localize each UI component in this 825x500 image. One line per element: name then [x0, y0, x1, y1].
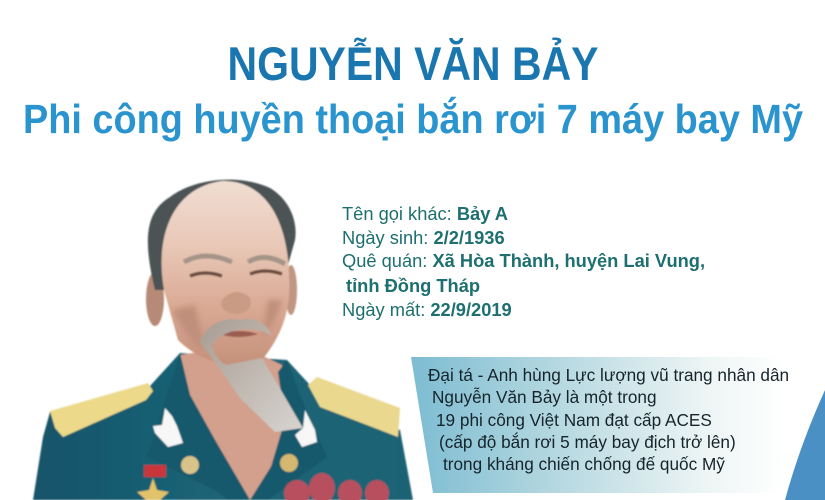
left collar pin — [181, 456, 199, 474]
right ear — [285, 265, 297, 315]
panel text: (cấp độ bắn rơi 5 máy bay địch trở lên) — [439, 432, 736, 452]
bio line: alias: Tên gọi khác: Bảy A — [342, 203, 508, 224]
panel text — [428, 365, 789, 474]
description panel — [411, 357, 825, 493]
mouth — [218, 331, 258, 337]
neck and open collar — [180, 345, 285, 500]
left collar lapel — [147, 353, 250, 500]
bio line: hometown: Quê quán: Xã Hòa Thành, huyện Lai Vung, — [342, 250, 705, 271]
moustache and goatee — [200, 319, 303, 432]
panel text: Đại tá - Anh hùng Lực lượng vũ trang nhân dân — [428, 365, 789, 385]
right collar pin — [280, 454, 298, 472]
hero medal — [137, 465, 169, 500]
portrait: veteran pilot in uniform — [33, 180, 413, 500]
right wing badge — [295, 410, 317, 447]
right collar lapel — [250, 360, 327, 500]
eyes — [190, 271, 282, 276]
nose — [221, 292, 251, 314]
panel text: 19 phi công Việt Nam đạt cấp ACES — [436, 410, 712, 430]
panel text: trong kháng chiến chống đế quốc Mỹ — [443, 454, 725, 474]
title: name: NGUYỄN VĂN BẢY — [228, 37, 598, 90]
bio line: birth date: Ngày sinh: 2/2/1936 — [342, 227, 505, 248]
corner arc — [785, 390, 825, 500]
bio line: province: tỉnh Đồng Tháp — [346, 275, 480, 296]
eyebrows — [184, 256, 285, 264]
cheek shade — [172, 300, 282, 350]
uniform jacket — [33, 353, 413, 500]
left wing badge — [153, 408, 183, 447]
left epaulet — [50, 383, 153, 437]
medal row — [284, 473, 389, 500]
panel background — [411, 357, 825, 493]
panel text: Nguyễn Văn Bảy là một trong — [432, 387, 657, 407]
bio details — [342, 203, 705, 320]
right epaulet — [308, 377, 400, 437]
left ear — [146, 272, 164, 326]
hair — [148, 180, 296, 290]
bio line: death date: Ngày mất: 22/9/2019 — [342, 299, 512, 320]
face — [162, 181, 289, 365]
